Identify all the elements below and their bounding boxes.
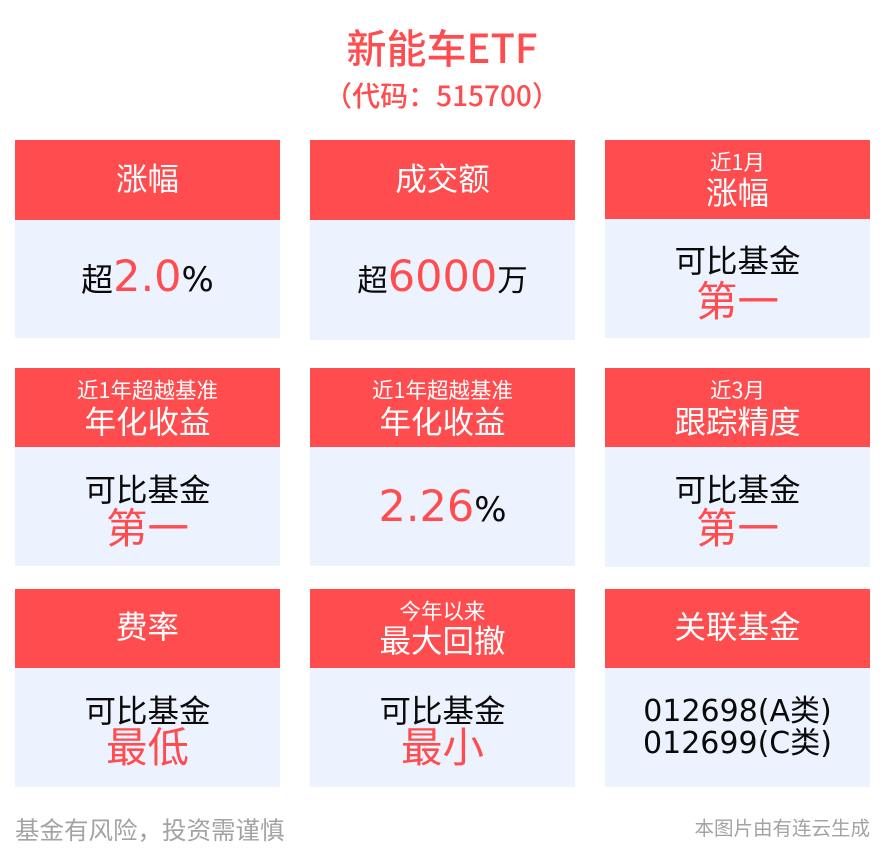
heading: 近1年超越基准 <box>77 374 218 405</box>
value: 可比基金最小: 最小 <box>401 714 484 774</box>
value: 超6000万: 超6000万 <box>357 252 528 302</box>
value: 可比基金第一: 可比基金 <box>84 465 210 511</box>
panel: 近1月涨幅 <box>605 140 870 338</box>
panel: 成交额 <box>310 140 575 340</box>
heading: 费率: 费率 <box>116 602 179 648</box>
heading: 今年以来 <box>399 595 486 626</box>
value: fund codes: 012698(A类) <box>643 694 832 729</box>
value: fund codes: 012699(C类) <box>643 726 832 761</box>
value: 可比基金最低: 最低 <box>106 714 189 774</box>
heading <box>379 595 506 662</box>
heading: 近1年超越基准 <box>372 374 513 405</box>
risk note: 基金有风险，投资需谨慎 <box>15 812 284 847</box>
value: 可比基金第一: 可比基金 <box>674 236 800 282</box>
value: 可比基金第一 <box>674 465 800 555</box>
panel: 关联基金 <box>605 589 870 787</box>
value: 可比基金最低 <box>84 686 210 774</box>
heading: 近3月 <box>710 374 765 405</box>
heading: 关联基金: 关联基金 <box>674 602 800 648</box>
value: 可比基金最小: 可比基金 <box>379 686 506 732</box>
value: 2.26%: 2.26% <box>378 482 507 532</box>
value: 可比基金第一 <box>674 236 800 328</box>
heading: 年化收益 <box>379 397 506 443</box>
title: 新能车ETF <box>346 17 538 75</box>
heading: 年化收益 <box>84 397 210 443</box>
value: 可比基金第一: 第一 <box>696 268 779 328</box>
panel: 涨幅 <box>15 140 280 338</box>
heading <box>77 374 218 443</box>
value: 可比基金第一: 可比基金 <box>674 465 800 511</box>
heading <box>372 374 513 443</box>
source note: 本图片由有连云生成 <box>694 812 870 841</box>
panel: 近3月跟踪精度 <box>605 368 870 567</box>
subtitle: fund code: （代码：515700） <box>324 75 560 115</box>
heading: 跟踪精度 <box>674 397 800 443</box>
panel: 费率 <box>15 589 280 787</box>
heading: 涨幅: 涨幅 <box>116 154 179 200</box>
value: 可比基金最小 <box>379 686 506 774</box>
heading: 近1月涨幅: 涨幅 <box>706 168 769 214</box>
value: 可比基金最低: 可比基金 <box>84 686 210 732</box>
heading: 最大回撤 <box>379 616 506 662</box>
panel: 今年以来最大回撤 <box>310 589 575 787</box>
panel: 近1年超越基准年化收益 B <box>310 368 575 566</box>
heading: 成交额: 成交额 <box>395 154 490 200</box>
heading <box>674 374 800 443</box>
value: 可比基金第一: 第一 <box>696 495 779 555</box>
panel: 近1年超越基准年化收益 A <box>15 368 280 566</box>
value: 可比基金第一 <box>84 465 210 555</box>
heading: 近1月涨幅 <box>706 146 769 214</box>
heading: 近1月涨幅: 近1月 <box>710 146 765 177</box>
value: fund codes <box>643 694 832 761</box>
value: 可比基金第一: 第一 <box>106 495 189 555</box>
value: 超2.0%: 超2.0% <box>81 252 214 302</box>
